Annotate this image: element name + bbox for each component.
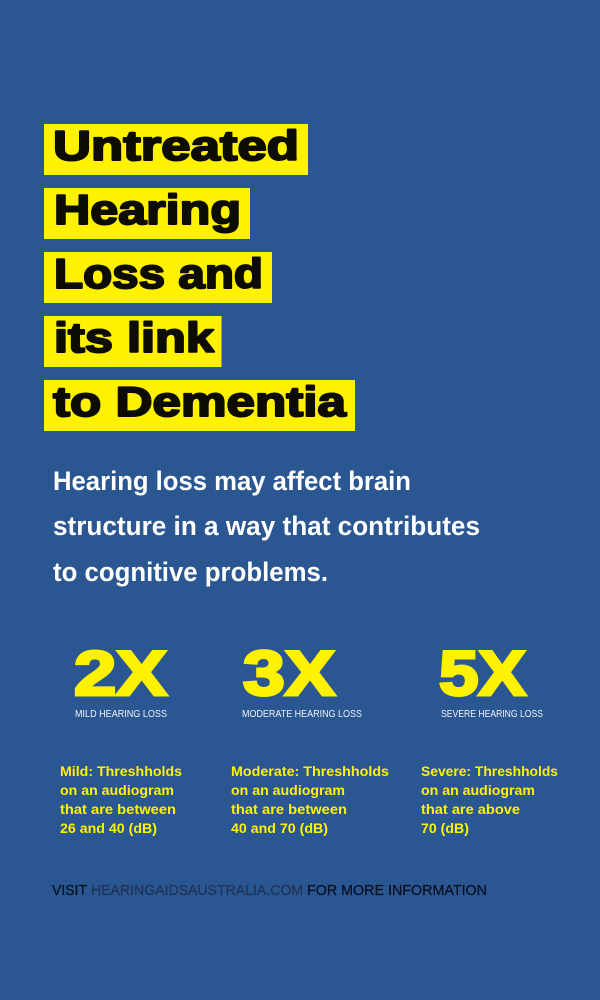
title line: Untreated: Untreated: [53, 122, 299, 169]
stat: 5X severe hearing loss: [439, 639, 543, 720]
footer call to action: HEARINGAIDSAUSTRALIA.COM: [91, 883, 303, 899]
stat: 3X moderate hearing loss: 3X: [243, 639, 335, 709]
stat: 2X mild hearing loss: MILD HEARING LOSS: [75, 708, 167, 720]
stat: 5X severe hearing loss: SEVERE HEARING LOSS: [441, 708, 543, 720]
footer call to action: VISIT: [52, 883, 87, 899]
intro text block: structure in a way that contributes: [53, 511, 480, 541]
title line: its link: its link: [54, 314, 215, 361]
title: [44, 122, 355, 431]
intro text block: [53, 466, 480, 587]
definition: severe: that are above: [421, 801, 520, 817]
title line: Untreated: [44, 122, 308, 175]
stat: 3X moderate hearing loss: MODERATE HEARING LOSS: [242, 708, 362, 720]
definition: mild: on an audiogram: [60, 782, 174, 798]
definition: severe: Severe: Threshholds: [421, 763, 558, 779]
footer call to action: FOR MORE INFORMATION: [307, 883, 487, 899]
definition: severe: on an audiogram: [421, 782, 535, 798]
definition: mild: 26 and 40 (dB): [60, 820, 157, 836]
definition: mild: that are between: [60, 801, 176, 817]
definition: severe: [421, 763, 558, 836]
stat: 2X mild hearing loss: 2X: [74, 639, 167, 709]
definition: mild: Mild: Threshholds: [60, 763, 182, 779]
definition: mild: [60, 763, 182, 836]
title line: Hearing: [44, 186, 250, 239]
intro text block: to cognitive problems.: [53, 557, 328, 587]
definition: moderate: 40 and 70 (dB): [231, 820, 328, 836]
title line: to Dementia: to Dementia: [53, 378, 347, 425]
title line: to Dementia: [44, 378, 355, 431]
definition: severe: 70 (dB): [421, 820, 469, 836]
title line: Loss and: Loss and: [54, 250, 263, 297]
definition: moderate: on an audiogram: [231, 782, 345, 798]
title line: its link: [44, 314, 222, 367]
definition: moderate: that are between: [231, 801, 347, 817]
title line: Hearing: Hearing: [54, 186, 241, 233]
stat: 5X severe hearing loss: 5X: [439, 639, 526, 709]
intro text block: Hearing loss may affect brain: [53, 466, 411, 496]
definition: moderate: Moderate: Threshholds: [231, 763, 389, 779]
footer call to action: [52, 883, 487, 899]
stat: 3X moderate hearing loss: [242, 639, 362, 720]
definition: moderate: [231, 763, 389, 836]
